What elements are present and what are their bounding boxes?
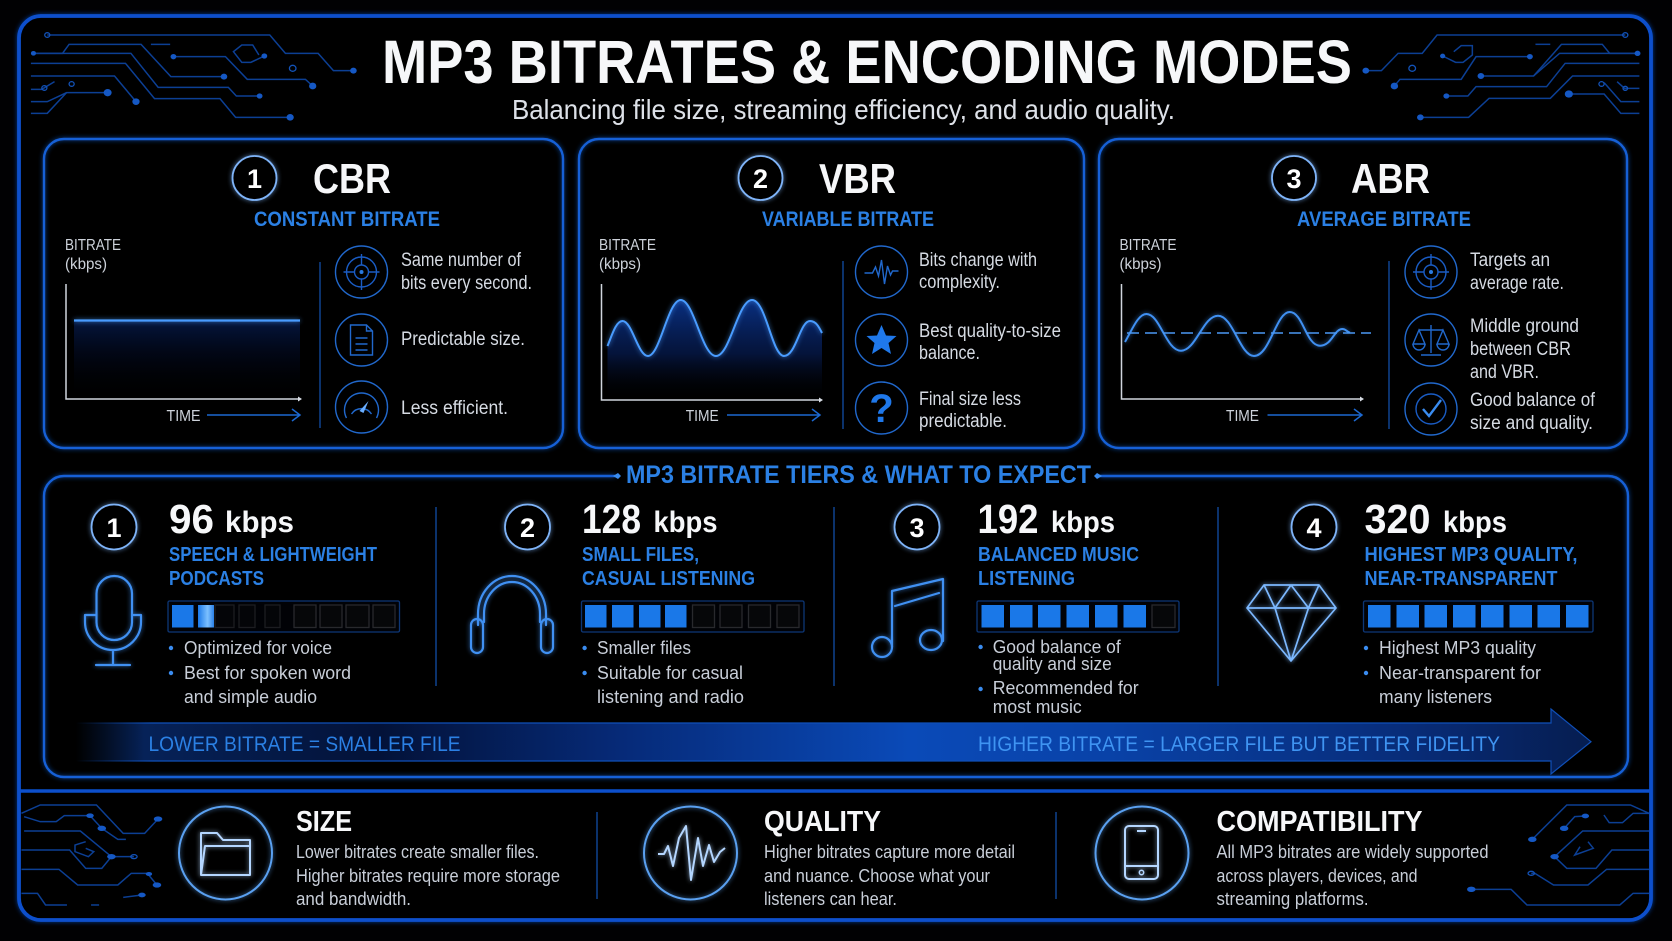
description [1216, 842, 1488, 909]
text: Less efficient. [401, 398, 508, 419]
quality meter [1364, 601, 1593, 632]
chart: constant bitrate: TIME [166, 408, 200, 425]
use case [169, 544, 377, 590]
text: between CBR [1470, 339, 1571, 360]
chart: average bitrate: TIME [1226, 408, 1259, 425]
heading: QUALITY [764, 806, 881, 838]
icon: waveform [856, 246, 908, 298]
use case: PODCASTS [169, 568, 264, 590]
number badge [894, 504, 940, 550]
number badge [92, 504, 136, 550]
bitrate value: kbps [1051, 506, 1115, 539]
use case: CASUAL LISTENING [582, 568, 755, 590]
bullets: Recommended for [993, 678, 1139, 698]
description: and nuance. Choose what your [764, 866, 990, 886]
title: MP3 BITRATES & ENCODING MODES [382, 28, 1352, 96]
heading: SIZE [296, 806, 352, 838]
feature: size [179, 806, 560, 909]
icon: question mark [856, 382, 908, 434]
description: Lower bitrates create smaller files. [296, 842, 539, 862]
heading CBR: CBR [313, 155, 391, 202]
number badge: 4 [1306, 513, 1322, 543]
bullets: Highest MP3 quality [1379, 638, 1536, 658]
icon: question mark: ? [869, 387, 894, 431]
feature: compatibility [1096, 806, 1488, 909]
text: and VBR. [1470, 362, 1539, 383]
number badge: 2 [520, 513, 535, 543]
subheading: AVERAGE BITRATE [1297, 208, 1471, 231]
bullets: Optimized for voice [184, 638, 332, 658]
chart: variable bitrate: (kbps) [599, 256, 641, 273]
icon: check [1405, 383, 1457, 435]
use case: BALANCED MUSIC [978, 544, 1139, 566]
description: Higher bitrates require more storage [296, 866, 560, 886]
subtitle: Balancing file size, streaming efficiency, and audio quality. [512, 94, 1175, 125]
tier 4: 320 kbps [1247, 496, 1593, 707]
bitrate value [582, 496, 718, 542]
use case [582, 544, 755, 590]
subheading: VARIABLE BITRATE [762, 208, 934, 231]
bullets: Smaller files [597, 638, 691, 658]
bullets: many listeners [1379, 687, 1492, 707]
bitrate value: kbps [225, 506, 294, 539]
bullets: and simple audio [184, 687, 317, 707]
number badge [505, 504, 550, 550]
icon: headphones [471, 576, 553, 653]
bullets: quality and size [993, 654, 1112, 674]
text: Bits change with [919, 250, 1037, 271]
description: and bandwidth. [296, 889, 411, 909]
number badge 3 [1272, 156, 1316, 200]
chart: average bitrate: (kbps) [1120, 256, 1162, 273]
quality meter [168, 601, 400, 632]
text: Final size less [919, 389, 1021, 410]
description: across players, devices, and [1216, 866, 1418, 886]
arrow band: lower to higher bitrate [76, 709, 1591, 774]
bitrate value: kbps [1443, 506, 1507, 539]
use case: LISTENING [978, 568, 1075, 590]
circuit decoration: bottom left [21, 805, 162, 905]
icon: microphone [85, 576, 141, 665]
quality meter [582, 601, 804, 632]
bullets [978, 637, 1139, 717]
heading VBR: VBR [819, 155, 896, 202]
chart: constant bitrate: (kbps) [65, 256, 107, 273]
feature: quality [644, 806, 1015, 909]
arrow band: lower to higher bitrate: HIGHER BITRATE = LARGER FILE BUT BETTER FIDELITY [978, 733, 1500, 756]
text: balance. [919, 343, 980, 364]
quality meter [977, 601, 1179, 632]
description: streaming platforms. [1216, 889, 1368, 909]
bullets [169, 638, 351, 707]
icon: folder [179, 806, 272, 900]
text: Best quality-to-size [919, 321, 1061, 342]
text: size and quality. [1470, 413, 1593, 434]
bullets: Suitable for casual [597, 663, 743, 683]
number badge [1292, 504, 1336, 550]
icon: phone [1096, 806, 1188, 900]
chart: constant bitrate: BITRATE [65, 237, 121, 254]
text: bits every second. [401, 273, 532, 294]
use case: NEAR-TRANSPARENT [1364, 568, 1558, 590]
use case: SPEECH & LIGHTWEIGHT [169, 544, 377, 566]
icon: document [336, 314, 388, 366]
heading: tiers: MP3 BITRATE TIERS & WHAT TO EXPECT [626, 461, 1091, 489]
bitrate value: 320 [1364, 496, 1430, 542]
panel: CBR [44, 139, 563, 448]
text: average rate. [1470, 273, 1564, 294]
bullets: Near-transparent for [1379, 663, 1541, 683]
description: All MP3 bitrates are widely supported [1216, 842, 1488, 862]
description [764, 842, 1015, 909]
number badge 1 [232, 156, 276, 200]
bullets: listening and radio [597, 687, 744, 707]
subheading: CONSTANT BITRATE [254, 208, 440, 231]
number badge 2: 2 [753, 164, 768, 194]
bullets [1364, 638, 1541, 707]
bitrate value: 128 [582, 496, 641, 542]
bitrate value: 96 [169, 496, 214, 542]
heading ABR: ABR [1351, 155, 1430, 202]
text: Targets an [1470, 250, 1550, 271]
icon: scales [1405, 314, 1457, 366]
text: Predictable size. [401, 329, 525, 350]
description: listeners can hear. [764, 889, 897, 909]
use case [1364, 544, 1578, 590]
chart: variable bitrate: TIME [686, 408, 719, 425]
number badge 1: 1 [247, 164, 262, 194]
icon: target [336, 246, 388, 298]
chart: average bitrate [1120, 237, 1371, 425]
bitrate value [1364, 496, 1507, 542]
chart: variable bitrate: BITRATE [599, 237, 656, 254]
heading: COMPATIBILITY [1216, 806, 1422, 838]
circuit decoration: top left [31, 33, 357, 121]
number badge: 1 [106, 513, 122, 543]
number badge 2 [738, 156, 782, 200]
icon: diamond [1247, 585, 1336, 661]
panel: bitrate tiers [44, 461, 1628, 777]
use case: HIGHEST MP3 QUALITY, [1364, 544, 1578, 566]
use case [978, 544, 1139, 590]
bullets: most music [993, 697, 1082, 717]
bullets [582, 638, 744, 707]
chart: variable bitrate [599, 237, 823, 425]
text: complexity. [919, 272, 1000, 293]
bitrate value [978, 496, 1115, 542]
text: Middle ground [1470, 316, 1579, 337]
tier 1: 96 kbps [85, 496, 400, 707]
icon: gauge [336, 381, 388, 433]
circuit decoration: bottom right [1467, 805, 1649, 905]
number badge 3: 3 [1286, 164, 1302, 194]
tier 3: 192 kbps [872, 496, 1179, 717]
icon: star [856, 314, 908, 366]
icon: music note [872, 579, 943, 657]
bitrate value: 192 [978, 496, 1038, 542]
arrow band: lower to higher bitrate: LOWER BITRATE = SMALLER FILE [148, 733, 460, 756]
panel: VBR [579, 139, 1084, 448]
use case: SMALL FILES, [582, 544, 699, 566]
bullets: Best for spoken word [184, 663, 351, 683]
chart: constant bitrate [65, 237, 302, 425]
text: predictable. [919, 411, 1007, 432]
panel: ABR [1099, 139, 1627, 448]
text: Same number of [401, 250, 522, 271]
bitrate value: kbps [654, 506, 718, 539]
description [296, 842, 560, 909]
circuit decoration: top right [1362, 33, 1640, 120]
bullets: Good balance of [993, 637, 1122, 657]
chart: average bitrate: BITRATE [1120, 237, 1176, 254]
icon: waveform [644, 806, 737, 900]
text: Good balance of [1470, 390, 1596, 411]
number badge: 3 [909, 513, 925, 543]
description: Higher bitrates capture more detail [764, 842, 1015, 862]
tier 2: 128 kbps [471, 496, 804, 707]
icon: target [1405, 246, 1457, 298]
bitrate value [169, 496, 294, 542]
